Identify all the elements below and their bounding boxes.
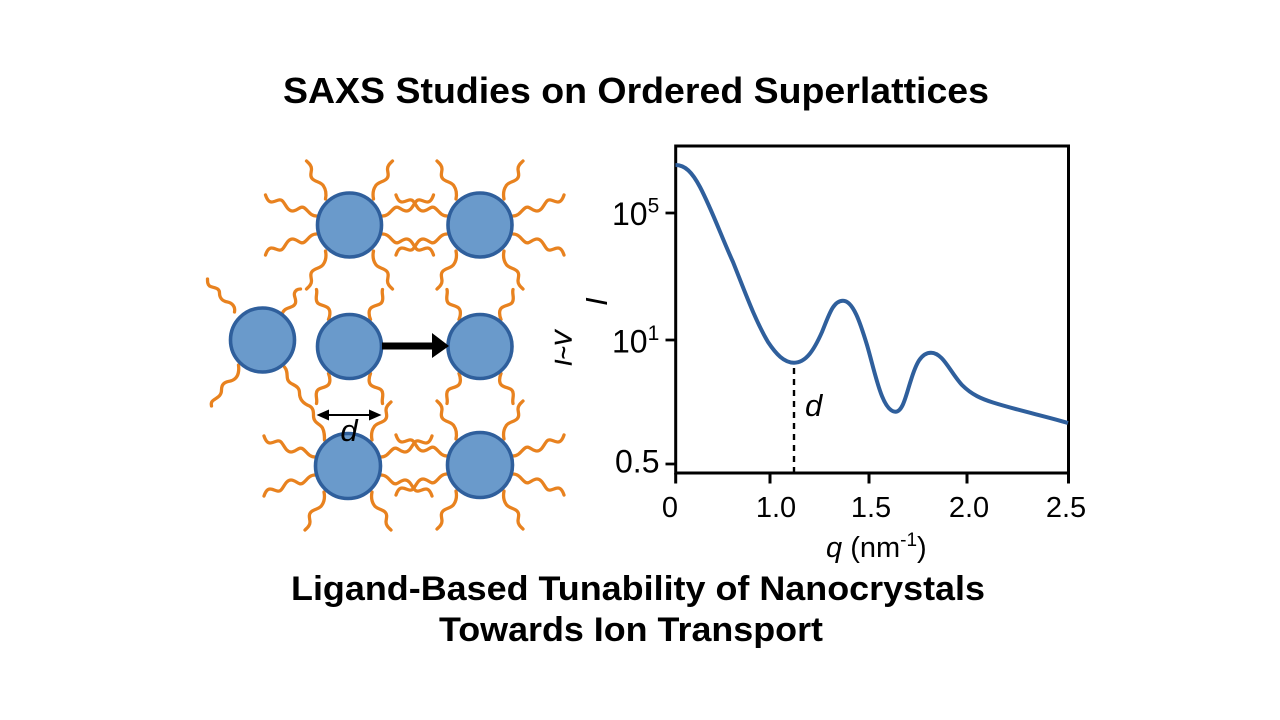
x tick labels: 2.5 [1046,492,1086,524]
subtitle: Towards Ion Transport [439,611,823,649]
x tick labels [662,492,1086,524]
nanocrystal: middle centre [316,290,383,404]
nanocrystal: middle far left [208,279,324,440]
x tick labels: 0 [662,492,678,524]
nanocrystal: bottom right [396,401,564,529]
x-axis title: -1 [900,530,917,551]
nanocrystal: top left [266,161,434,289]
arrow: spacing d [316,410,382,420]
x tick labels: 2.0 [949,492,989,524]
SAXS line chart [612,146,1086,564]
y tick label 10^1: 1 [648,322,659,345]
label: d spacing: d [340,413,359,448]
dashed marker at d [793,368,795,472]
y-axis ticks [666,213,675,464]
y tick label 10^1: 10 [612,324,648,360]
y tick label 10^5: 5 [648,194,659,218]
title: SAXS Studies on Ordered Superlattices [283,70,989,111]
label: d on chart: d [805,388,824,423]
y tick label 10^5: 10 [612,196,648,232]
plot frame [676,146,1068,473]
x-axis title: ) [917,532,927,564]
nanocrystal: top right [396,161,564,289]
y-axis label I: I [579,297,614,306]
arrow: bold lattice arrow [382,333,449,358]
y tick label 0.5: 0.5 [615,444,659,480]
y-axis rotated relation label: I~V [550,329,578,366]
x-axis ticks [676,473,1068,484]
x-axis title: q (nm [826,532,900,564]
subtitle [291,570,985,649]
x tick labels: 1.0 [756,492,796,524]
superlattice diagram [208,161,564,530]
x tick labels: 1.5 [851,492,891,524]
nanocrystal: middle right [447,290,513,404]
nanocrystal: bottom left [264,402,432,530]
subtitle: Ligand-Based Tunability of Nanocrystals [291,570,985,608]
scattering curve [676,165,1068,423]
